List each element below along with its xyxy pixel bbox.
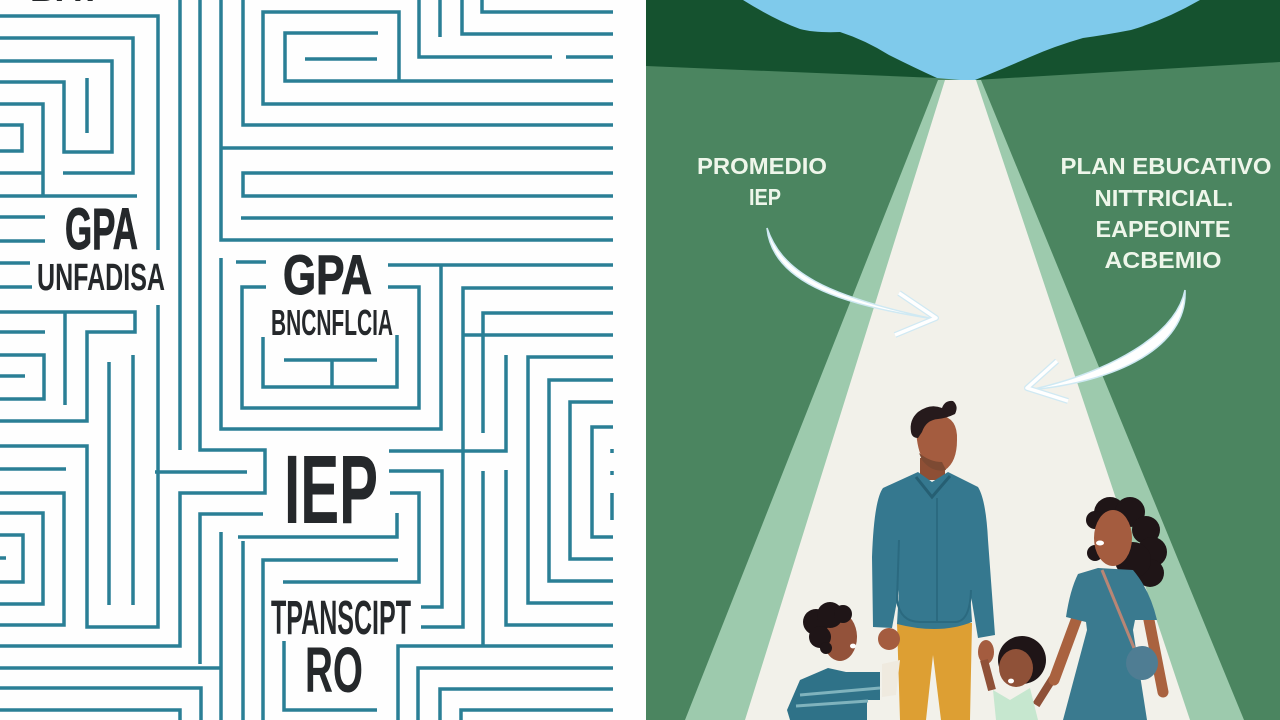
label: RO: RO — [305, 634, 363, 706]
figure: toddler — [984, 636, 1053, 720]
boy shirt stripes — [796, 688, 880, 706]
father shirt details — [897, 498, 971, 622]
label: GPA left: GPA — [65, 197, 138, 262]
father left hand — [878, 628, 900, 650]
boy sleeve highlight — [882, 660, 900, 697]
mother mouth — [1096, 540, 1104, 546]
label: TRANSCRIPT: TPANSCIPT — [271, 592, 411, 645]
father right hand — [978, 640, 994, 664]
right hill — [975, 0, 1280, 82]
figure: mother — [1054, 497, 1167, 720]
father hair — [911, 401, 957, 438]
mother strap — [1102, 570, 1134, 648]
toddler face — [999, 649, 1033, 687]
figure: boy — [787, 602, 900, 720]
boy shirt — [787, 668, 880, 720]
maze lines — [0, 0, 613, 720]
label: UNFADISA: UNFADISA — [37, 257, 165, 299]
label: PROMEDIO: PROMEDIO — [697, 153, 827, 179]
father beard — [919, 453, 946, 471]
road shoulder — [685, 80, 1244, 720]
father neck — [920, 458, 945, 480]
toddler body — [993, 688, 1038, 720]
white road — [745, 80, 1190, 720]
boy hair — [803, 602, 852, 654]
toddler mouth — [1008, 679, 1014, 683]
father collar — [916, 476, 950, 497]
mother arms — [1054, 615, 1163, 692]
label: NITTRICIAL: NITTRICIAL. — [1094, 185, 1234, 211]
label: IEP: IEP — [284, 435, 378, 544]
panel: maze of confusion — [0, 0, 613, 720]
label: BNCNFLCIA: BNCNFLCIA — [271, 302, 393, 343]
toddler arms — [984, 660, 1053, 705]
label: IEP: IEP — [749, 184, 781, 210]
father trousers — [897, 623, 972, 720]
left hill — [646, 0, 937, 82]
boy face — [823, 613, 857, 661]
label: PLAN EBUCATIVO: PLAN EBUCATIVO — [1060, 153, 1272, 179]
arrow: from right labels to road — [1027, 290, 1185, 401]
sky — [646, 0, 1280, 90]
figure: father — [872, 401, 995, 720]
mother face — [1094, 510, 1132, 566]
label: ACBEMIO: ACBEMIO — [1104, 247, 1222, 273]
mother bag — [1126, 646, 1158, 680]
green field — [646, 62, 1280, 720]
label: GPA centre: GPA — [283, 243, 372, 306]
label: EAPEOINTE: EAPEOINTE — [1096, 216, 1230, 242]
panel: clear path landscape — [646, 0, 1280, 720]
father face — [916, 415, 957, 470]
toddler hair — [998, 636, 1046, 684]
mother hair — [1086, 497, 1167, 587]
mother dress — [1063, 568, 1157, 720]
father shirt — [872, 472, 995, 638]
boy mouth — [850, 644, 856, 648]
arrow: from left labels to road — [767, 228, 936, 335]
